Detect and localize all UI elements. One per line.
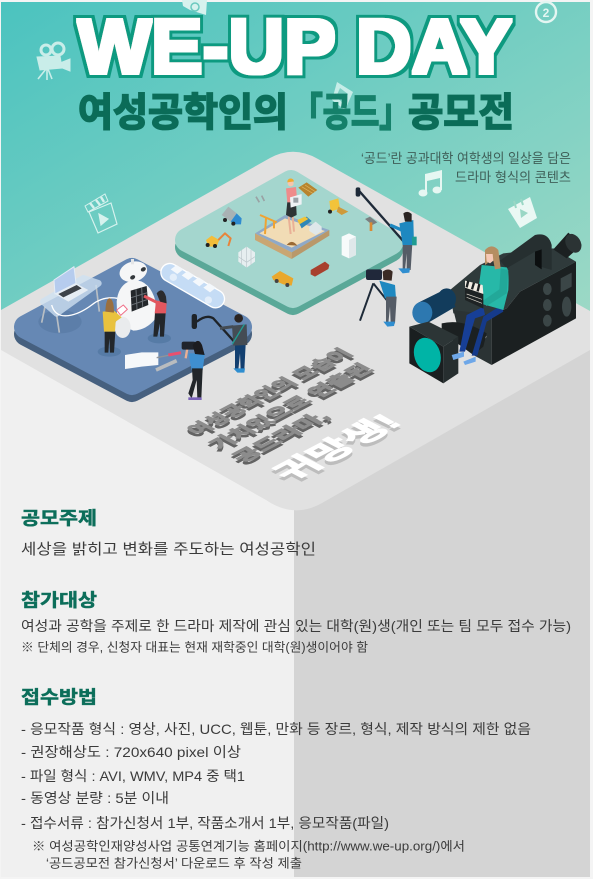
subtitle: 공모전 <box>408 92 514 135</box>
icon: crane <box>260 215 277 234</box>
heading: 접수방법 <box>21 688 97 708</box>
description <box>361 151 571 185</box>
note <box>32 840 465 870</box>
description: 드라마 형식의 콘텐츠 <box>455 170 571 185</box>
icon: clapper outline <box>85 194 117 233</box>
list: - 파일 형식 : AVI, WMV, MP4 중 택1 <box>21 768 245 784</box>
sitting woman <box>452 246 509 365</box>
subtitle: 「공드」 <box>292 92 410 135</box>
camera body <box>442 231 585 365</box>
title: WE-UP DAY <box>78 4 512 90</box>
slanted slogan: 여성공학인의 모습이 <box>183 346 358 438</box>
slanted slogan <box>183 346 378 465</box>
conveyor belt <box>158 260 228 311</box>
note: ※ 여성공학인재양성사업 공통연계기능 홈페이지(http://www.we-up.org/)에서 <box>32 840 465 854</box>
note: ‘공드공모전 참가신청서’ 다운로드 후 작성 제출 <box>46 856 302 870</box>
panel: construction platform <box>187 178 391 303</box>
sand pit <box>255 215 329 259</box>
list: - 권장해상도 : 720x640 pixel 이상 <box>21 744 241 760</box>
worker woman <box>286 178 302 234</box>
body text: 여성과 공학을 주제로 한 드라마 제작에 관심 있는 대학(원)생(개인 또는 팀 모두 접수 가능) <box>21 618 571 634</box>
list: - 응모작품 형식 : 영상, 사진, UCC, 웹툰, 만화 등 장르, 형식, 제작 방식의 제한 없음 <box>21 721 531 737</box>
heading: 참가대상 <box>21 590 97 610</box>
boom operator back <box>356 187 417 273</box>
tools and paper <box>125 352 181 370</box>
icon: clapper solid <box>508 197 537 228</box>
isometric grey floor <box>1 152 590 510</box>
slanted slogan: 공드라마, <box>228 409 335 465</box>
panel: robot platform <box>26 258 240 390</box>
vehicles <box>206 198 348 287</box>
material piles <box>297 182 322 235</box>
subtitle: 여성공학인의 <box>78 92 288 135</box>
body text: 세상을 밝히고 변화를 주도하는 여성공학인 <box>21 541 316 558</box>
buildings and bricks <box>238 196 377 277</box>
icon: film countdown <box>536 2 556 22</box>
glass desk and laptop <box>38 267 117 333</box>
list: - 접수서류 : 참가신청서 1부, 작품소개서 1부, 응모작품(파일) <box>21 815 389 831</box>
big video camera with sitting woman <box>409 231 585 383</box>
icon: music note <box>418 170 442 196</box>
icon: photo camera <box>182 0 207 15</box>
lens box <box>409 322 458 383</box>
microphone barrel <box>412 288 456 324</box>
subtitle <box>78 92 514 135</box>
section: how to apply <box>21 688 531 870</box>
woman in red <box>144 290 171 343</box>
camera operator front <box>182 341 205 400</box>
heading: 공모주제 <box>21 508 97 528</box>
slanted highlight: 귀망생! <box>264 409 409 485</box>
description: ‘공드’란 공과대학 여학생의 일상을 담은 <box>361 151 571 166</box>
list: - 동영상 분량 : 5분 이내 <box>21 790 169 806</box>
icon: film projector <box>37 43 70 80</box>
icon: film countdown: 2 <box>543 6 550 20</box>
woman in yellow <box>98 298 127 357</box>
list <box>21 721 531 831</box>
note: ※ 단체의 경우, 신청자 대표는 현재 재학중인 대학(원)생이어야 함 <box>21 640 368 654</box>
section: eligibility <box>21 590 571 654</box>
slanted slogan: 가치있으로 연출된 <box>205 361 378 452</box>
icon: film strip <box>332 82 353 110</box>
camera operator back <box>360 269 397 327</box>
robot <box>115 258 156 338</box>
boom operator front <box>192 314 247 373</box>
section: contest theme <box>21 508 316 558</box>
